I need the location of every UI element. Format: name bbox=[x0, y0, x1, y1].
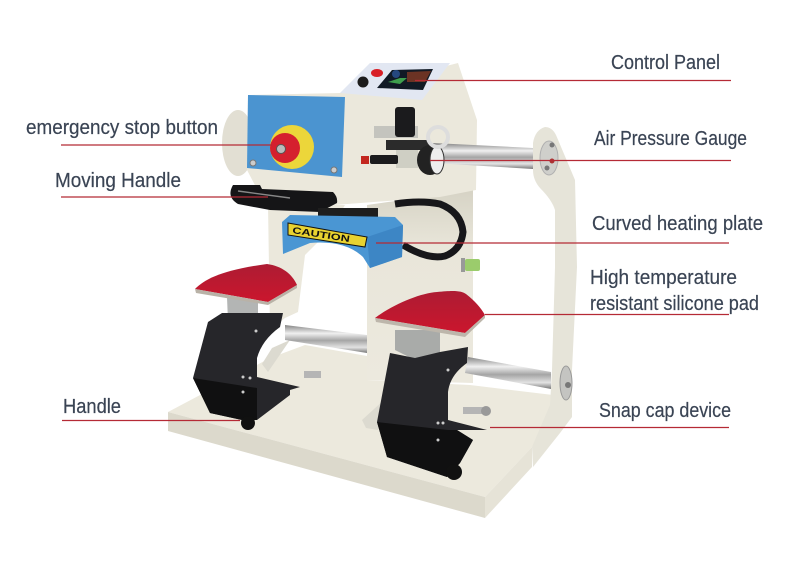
left column bbox=[268, 205, 345, 330]
blue panel bbox=[247, 95, 345, 177]
right silicone pad bbox=[375, 291, 485, 337]
control panel bbox=[340, 63, 450, 100]
label: silicone pad: resistant silicone pad bbox=[590, 293, 759, 315]
label: silicone pad bbox=[485, 267, 759, 315]
left silicone pad bbox=[195, 264, 297, 305]
right knob bbox=[446, 464, 462, 480]
label: silicone pad: High temperature bbox=[590, 267, 737, 289]
left knob bbox=[241, 416, 255, 430]
heating plate: CAUTION bbox=[292, 225, 351, 244]
label: control panel: Control Panel bbox=[611, 52, 720, 74]
label: curved heating plate: Curved heating plate bbox=[592, 213, 763, 235]
right arm bbox=[532, 127, 577, 467]
label: moving handle: Moving Handle bbox=[55, 170, 181, 192]
heating plate bbox=[282, 208, 403, 268]
hose bbox=[395, 202, 463, 257]
left pad stem bbox=[227, 297, 258, 322]
upper rod bbox=[433, 143, 533, 169]
air regulator and gauge bbox=[361, 107, 448, 175]
level fitting bbox=[461, 258, 480, 272]
label: emergency stop button: emergency stop button bbox=[26, 117, 218, 139]
moving handle bbox=[230, 185, 337, 212]
emergency stop button bbox=[250, 125, 337, 173]
label: snap cap device: Snap cap device bbox=[599, 400, 731, 422]
arm bolt plates bbox=[540, 141, 572, 400]
label: air pressure gauge: Air Pressure Gauge bbox=[594, 128, 747, 150]
bolts bbox=[304, 371, 491, 416]
machine illustration bbox=[168, 63, 577, 518]
lower rods bbox=[285, 325, 551, 389]
label: handle: Handle bbox=[63, 396, 121, 418]
base plate bbox=[168, 340, 553, 518]
right clamp bbox=[377, 347, 487, 477]
right column bbox=[367, 190, 473, 383]
upper body bbox=[247, 63, 477, 210]
left cylinder bbox=[222, 110, 254, 176]
left clamp bbox=[193, 313, 300, 420]
right pad stem bbox=[395, 330, 440, 360]
